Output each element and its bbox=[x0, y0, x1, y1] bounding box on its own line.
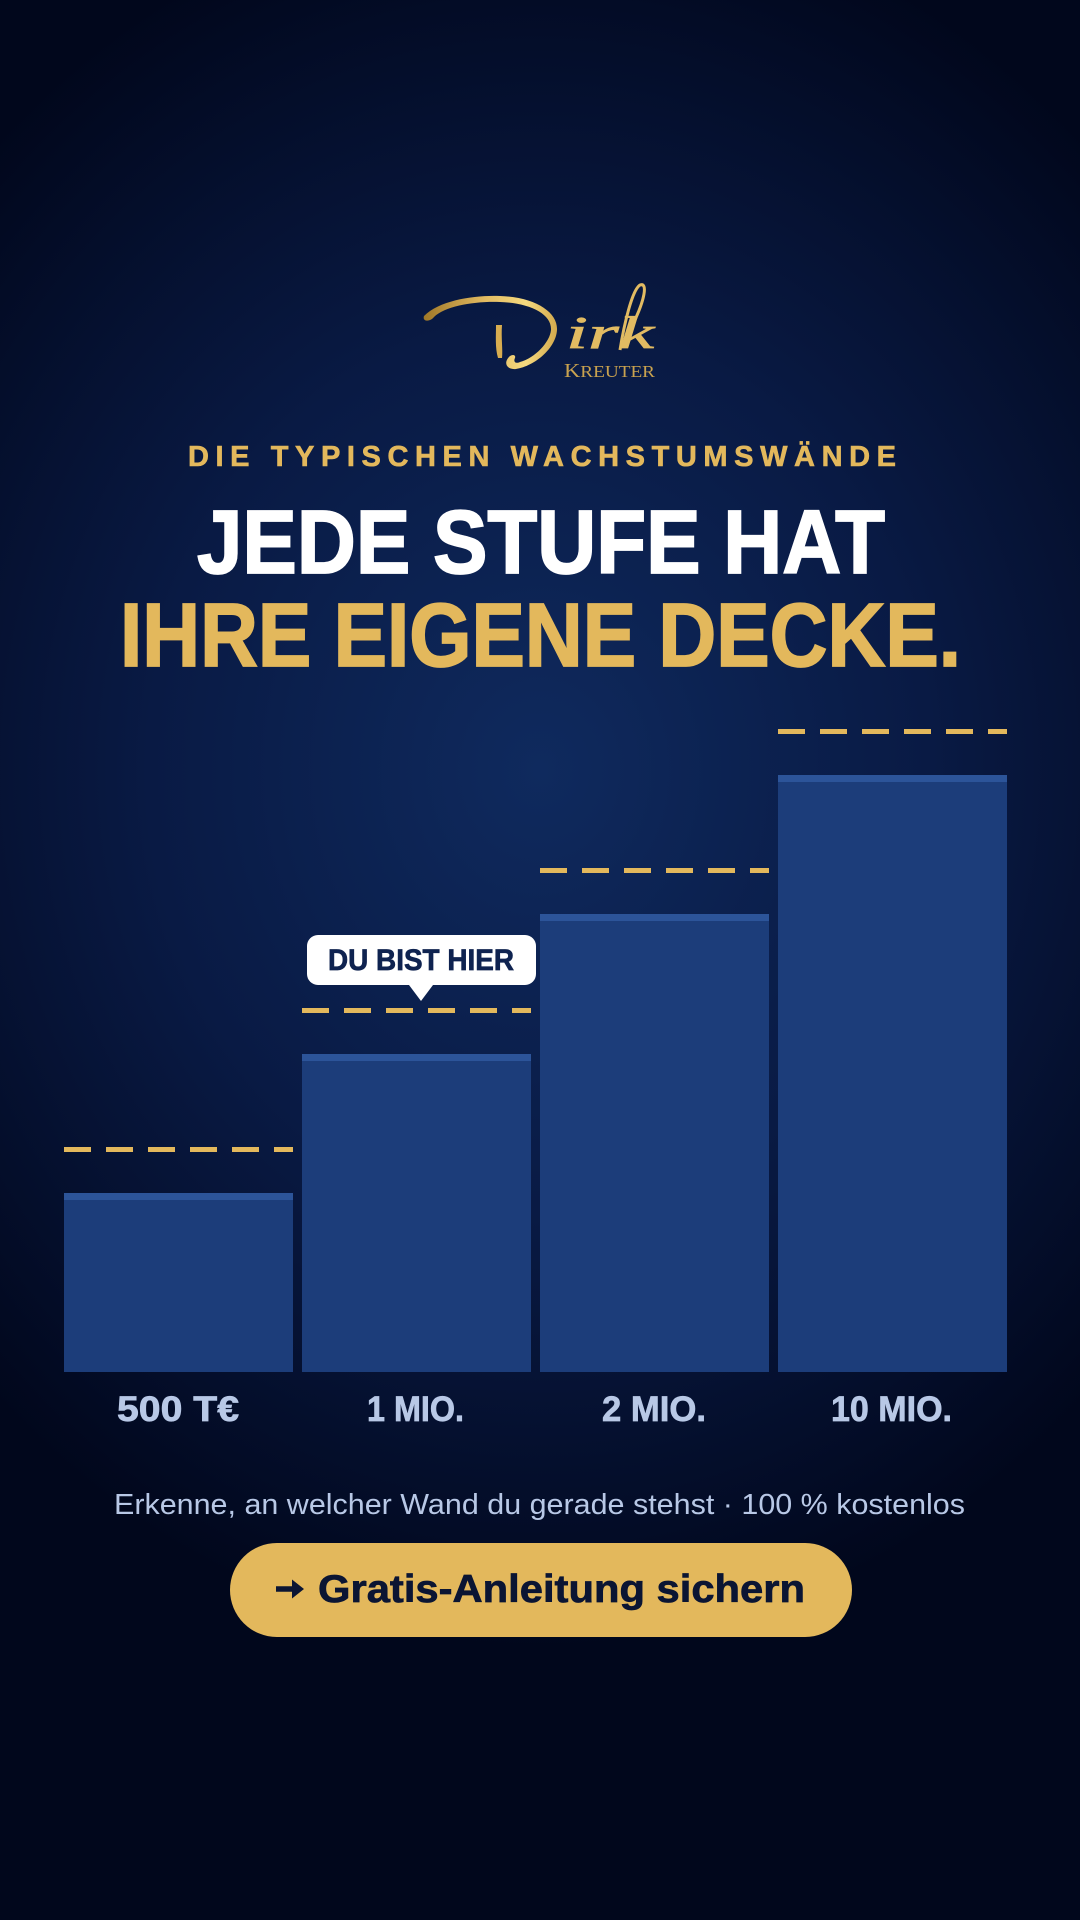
icon: arrow bbox=[276, 1580, 304, 1598]
axis labels bbox=[117, 1390, 952, 1429]
title line 1: JEDE STUFE HAT bbox=[197, 493, 885, 593]
bar: 10 Mio. bbox=[778, 732, 1007, 1372]
subline text: Erkenne, an welcher Wand du gerade stehst · 100 % kostenlos bbox=[114, 1489, 965, 1521]
bar: 1 Mio. bbox=[302, 1010, 531, 1372]
bar: 2 Mio. bbox=[540, 870, 769, 1372]
label: 2 Mio.: 2 MIO. bbox=[602, 1390, 706, 1429]
title line 2: IHRE EIGENE DECKE. bbox=[120, 586, 961, 686]
label: 1 Mio.: 1 MIO. bbox=[367, 1390, 464, 1429]
button: call to action: Gratis-Anleitung sichern bbox=[318, 1568, 805, 1611]
logo stem bbox=[496, 325, 502, 358]
callout: du bist hier: DU BIST HIER bbox=[328, 944, 514, 977]
bar chart bbox=[64, 732, 1007, 1372]
label: 10 Mio.: 10 MIO. bbox=[831, 1390, 952, 1429]
eyebrow heading: DIE TYPISCHEN WACHSTUMSWÄNDE bbox=[188, 440, 896, 473]
logo name text: irk bbox=[566, 307, 657, 358]
title bbox=[120, 493, 961, 686]
logo ascender loop bbox=[620, 285, 644, 350]
callout: du bist hier bbox=[307, 935, 536, 1001]
logo flourish bbox=[424, 296, 557, 369]
label: 500 T€: 500 T€ bbox=[117, 1390, 239, 1429]
logo surname: KREUTER bbox=[564, 360, 656, 382]
logo: Dirk Kreuter signature bbox=[424, 285, 657, 382]
bar: 500 T€ bbox=[64, 1150, 293, 1372]
button: call to action bbox=[230, 1543, 852, 1637]
